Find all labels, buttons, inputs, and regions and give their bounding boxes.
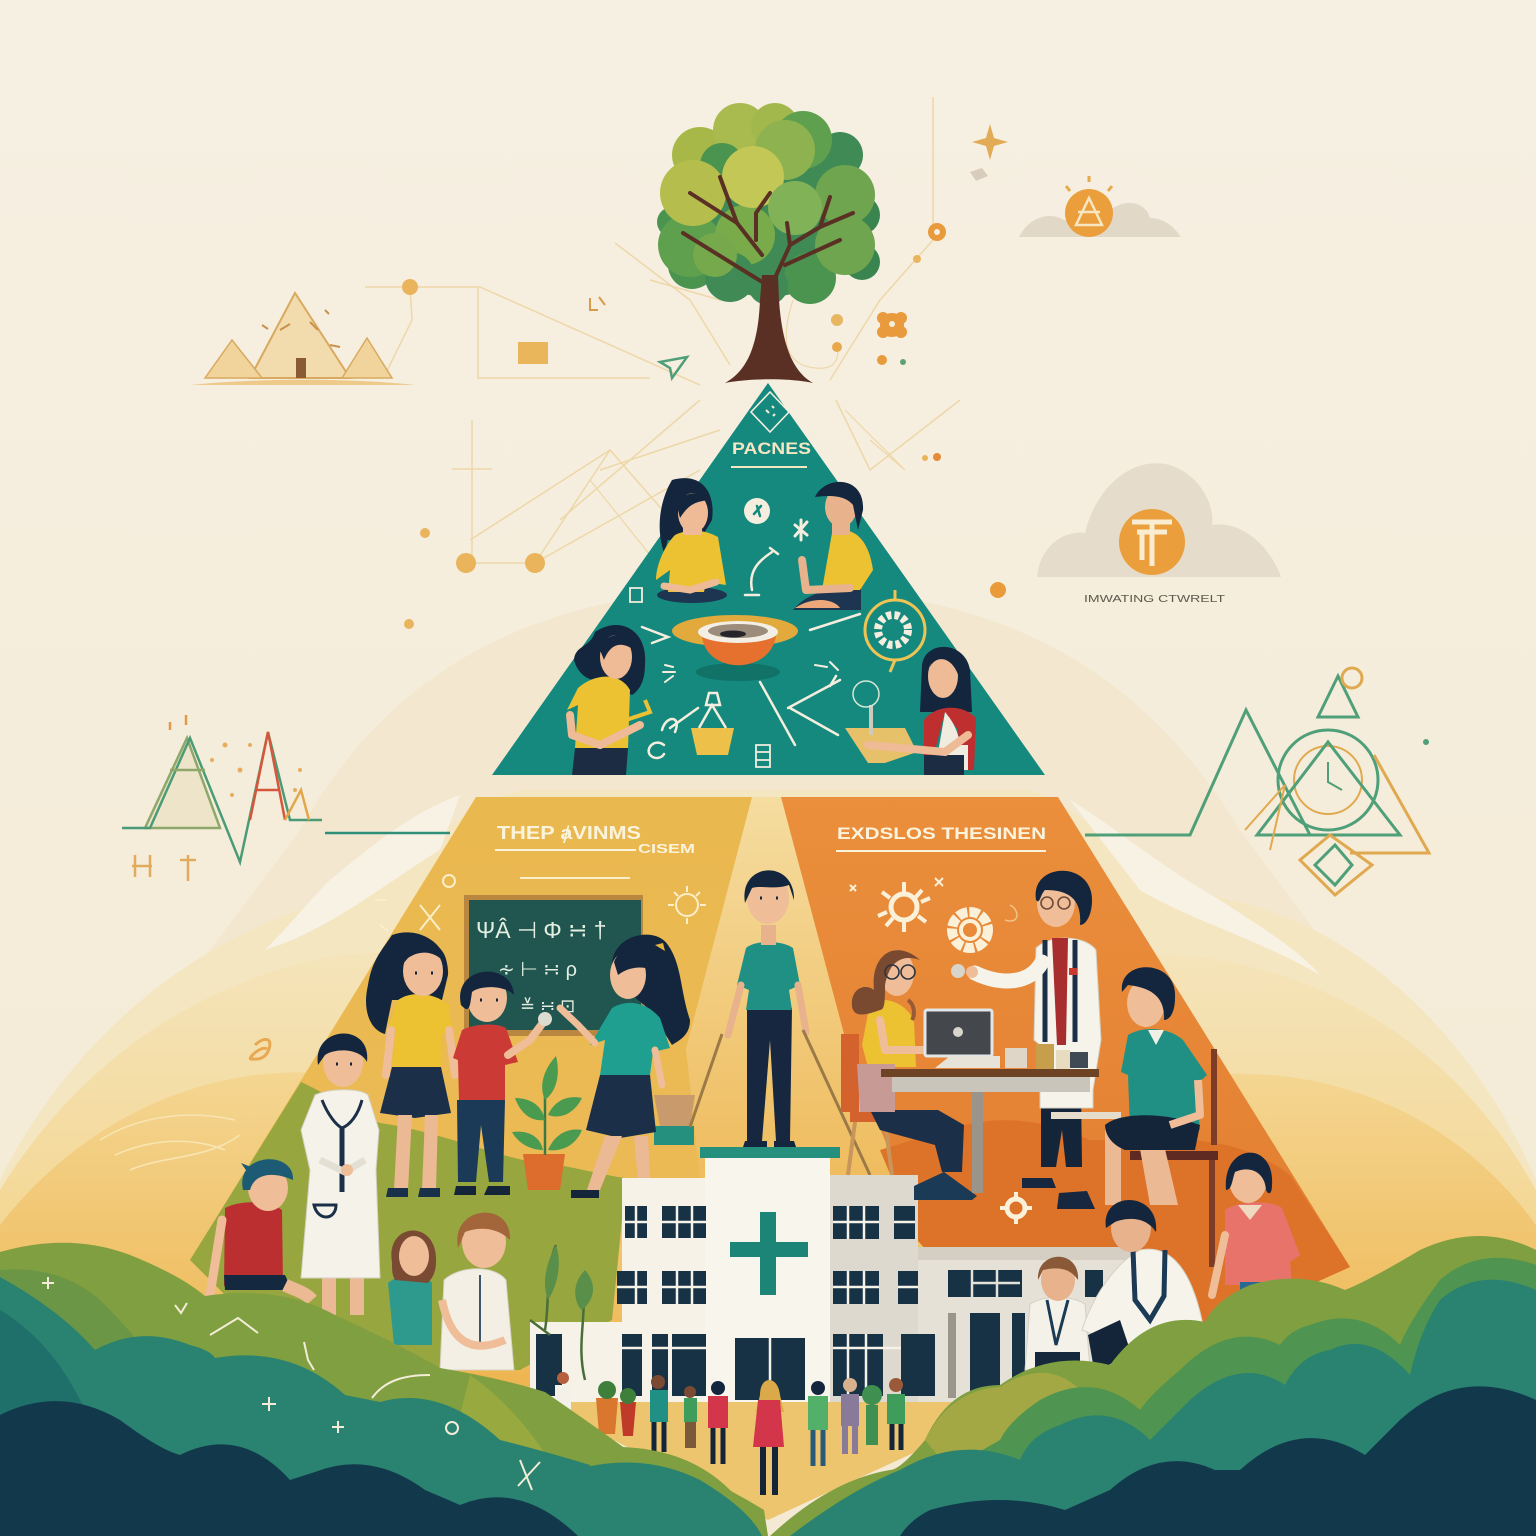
- center bowl: [672, 615, 798, 681]
- panel: left yellow: [190, 797, 752, 1320]
- person: boy in white right: [1082, 1200, 1203, 1375]
- foreground hills left: [0, 1243, 768, 1536]
- hill doodles: [42, 1277, 540, 1490]
- person: seated girl top left: [656, 478, 727, 603]
- person: girl lower right with vest: [845, 647, 976, 775]
- panel: top teal triangle: [492, 383, 1045, 775]
- blackboard writing: ≚ ∺ ⊡: [520, 996, 575, 1016]
- left panel heading: [495, 823, 695, 856]
- blackboard writing: [476, 917, 607, 1016]
- left hill scribble: [100, 1039, 270, 1170]
- icon: sparkle: [972, 124, 1008, 160]
- chalk doodles: [630, 498, 860, 767]
- person: boy in white bottom: [440, 1213, 514, 1370]
- left geometry chart: [122, 715, 450, 881]
- right panel heading: EXDSLOS THESINEN: [837, 824, 1046, 843]
- person: seated girl with glasses: [841, 950, 977, 1200]
- tree canopy: [657, 103, 880, 305]
- person: boy small right: [1025, 1257, 1090, 1382]
- student group left: [555, 1372, 728, 1464]
- cloud caption: IMWATING CTWRELT: [1084, 593, 1226, 605]
- title rule: [731, 466, 807, 468]
- blackboard: [464, 895, 643, 1036]
- student: red dress center: [753, 1380, 784, 1495]
- left scatter dots: [210, 742, 302, 797]
- potted plant: [512, 1056, 582, 1190]
- small flower icons: [831, 168, 988, 365]
- orange floor shading: [880, 1120, 1350, 1330]
- icon: basket: [691, 693, 734, 755]
- small square node and arrow: [518, 297, 687, 378]
- person: boy in white coat: [301, 1033, 380, 1315]
- left panel heading: CISEM: [638, 841, 695, 856]
- connector network behind pyramid: [365, 97, 960, 563]
- blackboard writing: ΨÂ ⊣ Φ ∺ †: [476, 917, 607, 943]
- person: standing center boy: [690, 870, 870, 1175]
- foreground hills right: [770, 1236, 1536, 1536]
- roof: [700, 1147, 840, 1158]
- person: boy in red: [453, 972, 552, 1195]
- panel: right orange: [781, 797, 1350, 1330]
- person: seated boy top right: [793, 482, 873, 610]
- icon: large cloud badge: [1037, 463, 1281, 577]
- table with laptop: [881, 1010, 1099, 1193]
- diamond emblem: [751, 392, 789, 432]
- left wing and small tree: [530, 1245, 622, 1402]
- person: boy in pink: [1212, 1153, 1300, 1300]
- icon: gear and sun: [850, 878, 1032, 1224]
- windows: [570, 1206, 918, 1400]
- person: seated boy in red: [210, 1159, 312, 1300]
- person: boy in teal seated: [1051, 967, 1218, 1267]
- teal book stack: [654, 1095, 695, 1145]
- yellow path: [540, 1402, 985, 1520]
- person: girl bottom left: [388, 1230, 436, 1345]
- person: girl in teal: [560, 935, 690, 1198]
- top panel title: PACNES: [732, 439, 811, 458]
- icon: left mini pyramids: [190, 293, 415, 385]
- person: scientist: [951, 871, 1101, 1209]
- school cross: [730, 1212, 808, 1295]
- tree trunk: [683, 177, 853, 383]
- network nodes: [402, 255, 1006, 629]
- background hills: [0, 585, 1536, 1400]
- small students on path: [555, 1372, 905, 1495]
- person: girl in yellow: [366, 932, 455, 1197]
- person: girl lower left: [567, 625, 650, 775]
- blackboard writing: ∻ ⊢ ∺ ρ: [498, 959, 577, 981]
- left panel heading: THEP ⱥVINMS: [497, 823, 641, 843]
- right geometry chart: [1085, 668, 1429, 895]
- icon: ring emblem: [865, 590, 925, 672]
- panel: left green: [190, 1082, 626, 1370]
- small doodles on left panel: [375, 875, 706, 931]
- school right wing: [901, 1247, 1133, 1404]
- icon: small cloud with triangle badge: [1019, 176, 1181, 237]
- school main building: [570, 1147, 918, 1404]
- student group right: [808, 1378, 905, 1466]
- central light beam: [630, 797, 900, 1180]
- tree: [657, 103, 880, 383]
